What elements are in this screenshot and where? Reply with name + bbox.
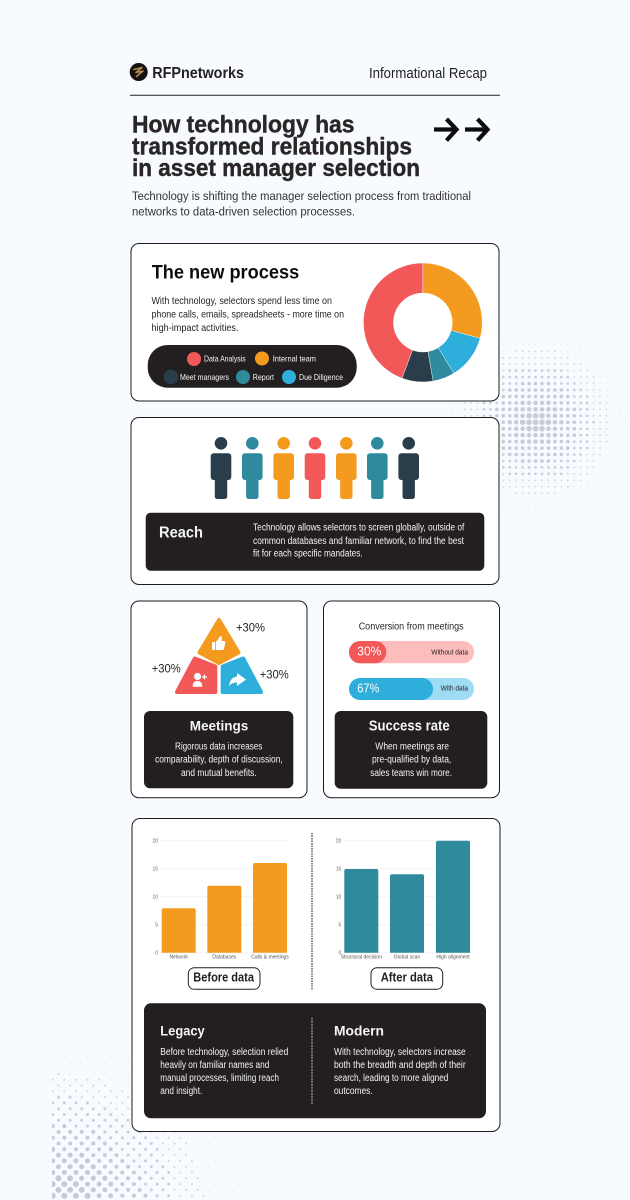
bar chart: after data: 10 [336, 894, 342, 900]
subtitle: Technology is shifting the manager selection process from traditional [132, 189, 471, 203]
bar chart: after data: Structural decision [341, 954, 382, 960]
legend: Due Diligence [299, 372, 343, 382]
bar chart: after data: 20 [336, 838, 342, 844]
title: How technology has [132, 112, 354, 138]
text block [152, 295, 344, 334]
label: before data [188, 968, 260, 989]
legend [148, 345, 357, 388]
text block: With technology, selectors spend less time on [152, 295, 332, 307]
donut chart [363, 263, 482, 382]
modern column: With technology, selectors increase [334, 1047, 466, 1058]
legend: Report [253, 372, 275, 382]
label: after data [371, 968, 443, 989]
legacy and modern text box [144, 1003, 486, 1118]
legend: Internal team [273, 353, 316, 363]
bar chart: before data: 5 [155, 922, 158, 928]
halftone dots: right [445, 338, 626, 506]
panel: meetings: +30% [152, 662, 181, 676]
bar chart: after data: 15 [336, 866, 342, 872]
meetings text box: comparability, depth of discussion, [155, 755, 283, 766]
progress bar: with data [349, 678, 474, 700]
bar chart: after data: Global scan [394, 954, 420, 960]
meetings text box: Meetings [190, 718, 248, 734]
legend: Meet managers [180, 372, 229, 382]
panel: meetings [131, 601, 307, 798]
panel: success rate [324, 601, 500, 798]
header label: Informational Recap [369, 66, 487, 82]
progress bar: with data: 67% [357, 681, 380, 696]
meetings text box: Rigorous data increases [175, 741, 262, 752]
meetings text box [144, 711, 293, 788]
subtitle [132, 189, 471, 219]
heading: The new process [152, 261, 299, 283]
success text box: Success rate [369, 718, 450, 735]
legacy column: and insight. [160, 1086, 202, 1097]
panel: reach [131, 418, 499, 584]
header [130, 63, 487, 82]
bar chart: before data: 15 [152, 866, 158, 872]
reach text box: fit for each specific mandates. [253, 549, 363, 560]
icon: double arrows [434, 119, 488, 140]
modern column: search, leading to more aligned [334, 1073, 448, 1084]
legacy column: Legacy [160, 1023, 205, 1039]
progress bar: without data: Without data [431, 649, 468, 656]
legend: Data Analysis [204, 354, 246, 364]
progress bar: with data: With data [441, 686, 468, 693]
modern column: outcomes. [334, 1086, 373, 1097]
bar chart: before data: 0 [155, 950, 158, 956]
text block: phone calls, emails, spreadsheets - more time on [152, 309, 344, 321]
bar chart: before data: 10 [152, 894, 158, 900]
icon: thumbs up [212, 636, 225, 650]
bar chart: before data: Databases [212, 954, 237, 960]
modern column [334, 1023, 466, 1097]
icon: add user [193, 673, 207, 687]
success text box: When meetings are [375, 741, 449, 752]
reach text box: Technology allows selectors to screen globally, outside of [253, 523, 464, 534]
meetings text box: and mutual benefits. [181, 768, 257, 779]
title [132, 112, 420, 182]
modern column: Modern [334, 1023, 384, 1039]
panel: before and after data [132, 818, 500, 1132]
triangle diagram [177, 620, 261, 692]
title: transformed relationships [132, 134, 412, 160]
legacy column: manual processes, limiting reach [160, 1073, 279, 1084]
brand name: RFPnetworks [152, 65, 244, 82]
bar chart: after data: High alignment [436, 954, 470, 960]
text block: high-impact activities. [152, 322, 238, 334]
bar chart: before data [152, 838, 289, 960]
chart title: Conversion from meetings [359, 622, 464, 633]
subtitle: networks to data-driven selection processes. [132, 205, 355, 219]
success text box: sales teams win more. [370, 768, 452, 779]
icon: logo [130, 63, 148, 81]
bar chart: before data: 20 [152, 838, 158, 844]
panel: meetings: +30% [260, 668, 289, 682]
success text box [335, 711, 487, 789]
success text box: pre-qualified by data, [372, 755, 451, 766]
legacy column: Before technology, selection relied [160, 1047, 288, 1058]
label: before data: Before data [193, 971, 255, 985]
halftone dots: bottom left [53, 1045, 242, 1196]
stat labels: +30% [236, 621, 265, 635]
reach text box: common databases and familiar network, to find the best [253, 536, 464, 547]
reach text box: Reach [159, 525, 203, 542]
panel: the new process [131, 244, 499, 401]
reach text box [146, 513, 484, 571]
icon: share arrow [229, 673, 246, 686]
progress bar: without data [349, 641, 474, 663]
bar chart: before data: Network [170, 954, 188, 960]
bar chart: after data: 0 [339, 950, 342, 956]
bar chart: after data: 5 [339, 922, 342, 928]
bar chart: after data [336, 838, 470, 960]
legacy column: heavily on familiar names and [160, 1060, 269, 1071]
progress bar: without data: 30% [357, 644, 382, 659]
icon: row of people [211, 437, 419, 499]
modern column: both the breadth and depth of their [334, 1060, 466, 1071]
title: in asset manager selection [132, 156, 420, 182]
bar chart: before data: Calls & meetings [251, 954, 289, 960]
label: after data: After data [381, 971, 434, 985]
legacy column [160, 1023, 288, 1097]
